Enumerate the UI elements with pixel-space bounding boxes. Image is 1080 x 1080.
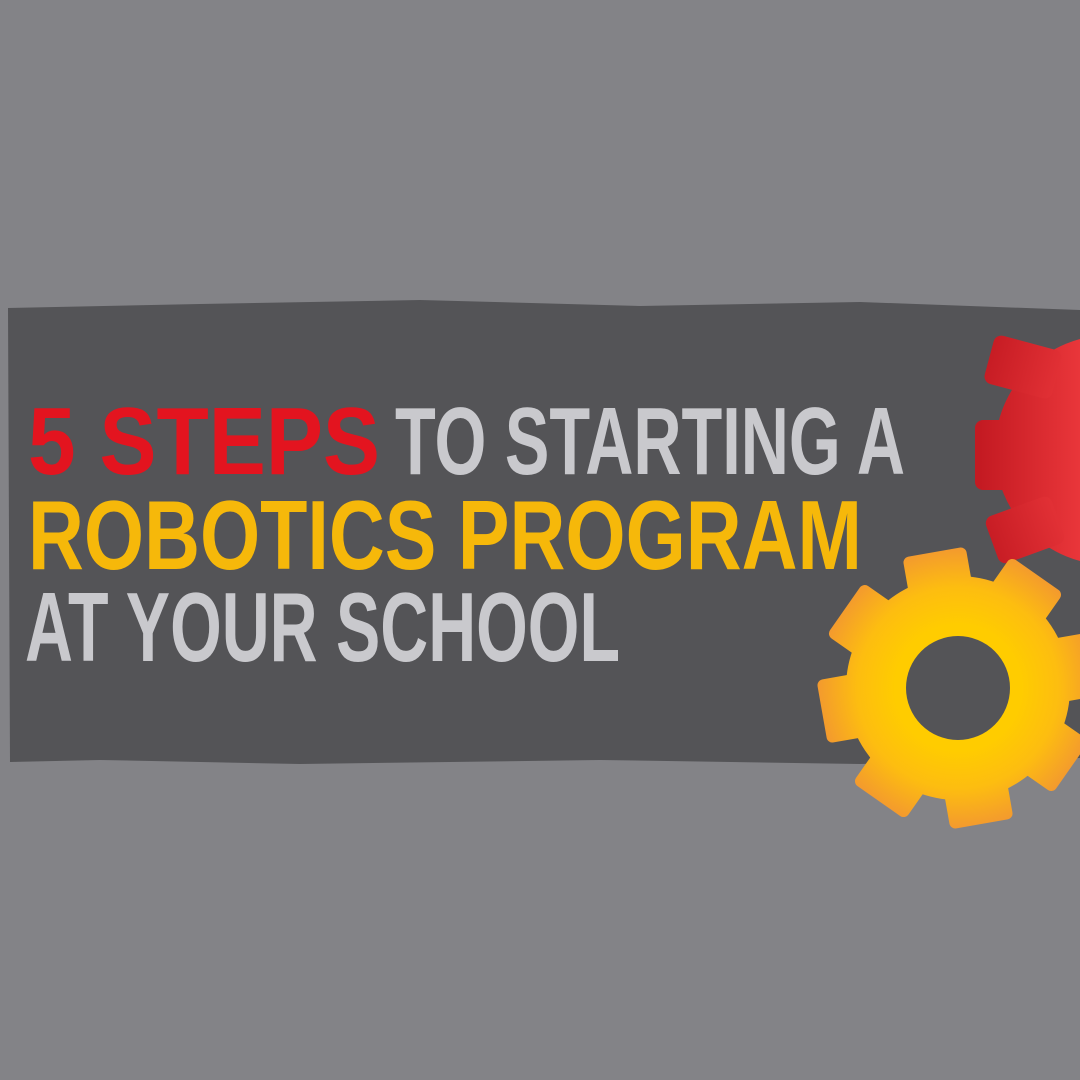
title: [25, 388, 905, 682]
icon: yellow gear: [817, 547, 1080, 829]
icon: red gear: [975, 334, 1080, 565]
title: ROBOTICS PROGRAM: [28, 480, 862, 590]
title: 5 STEPS: [28, 388, 380, 495]
title: AT YOUR SCHOOL: [25, 572, 620, 682]
banner: [8, 300, 1080, 764]
